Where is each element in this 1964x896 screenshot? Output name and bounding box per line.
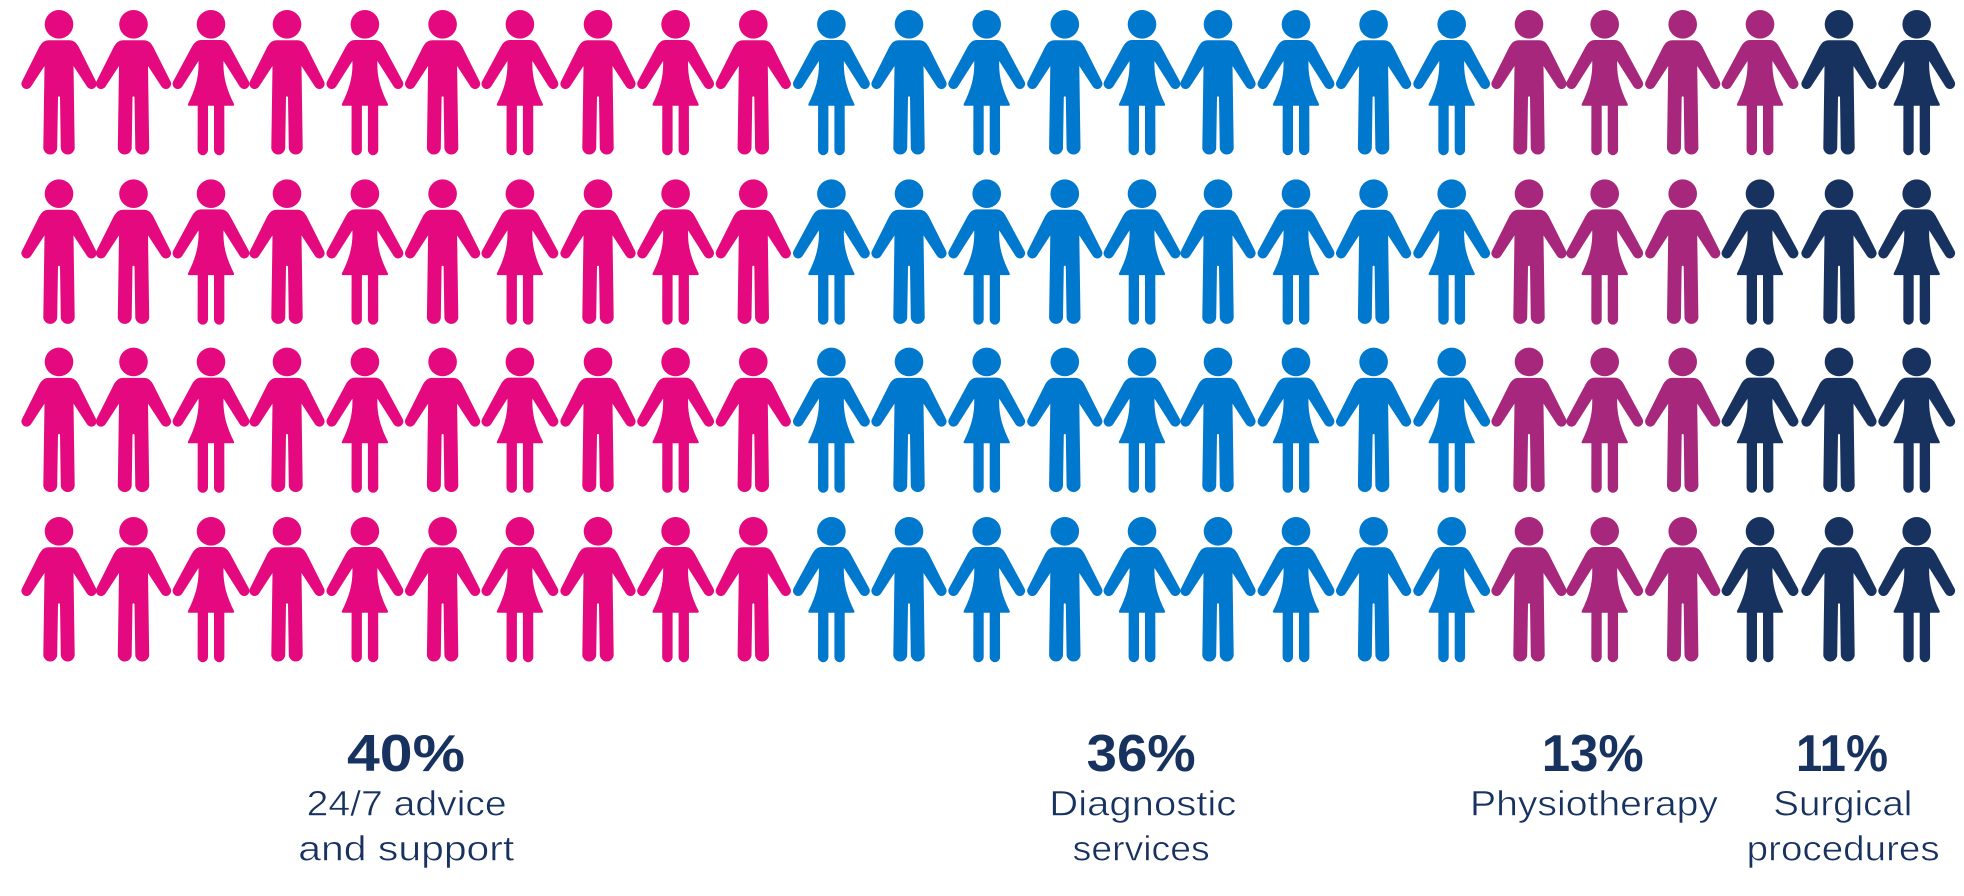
row 1 pink figures: 24/7 advice and support [21,10,791,155]
label: 11% surgical procedures: 11% [1796,725,1888,783]
pictogram row 1 [21,10,1955,155]
row 1 purple figures: physiotherapy [1491,10,1798,155]
row 4 blue figures [793,517,1490,662]
label: 36% diagnostic services: 36% [1087,725,1196,783]
label: 40% 24/7 advice and support: and support [298,830,515,869]
label: 40% 24/7 advice and support: 24/7 advice [307,785,507,824]
row 4 purple figures [1491,517,1720,662]
row 4 pink figures [21,517,791,662]
row 2 blue figures [793,179,1490,325]
row 3 pink figures [21,348,791,493]
pictogram row 3 [21,348,1955,493]
label: 11% surgical procedures [1747,725,1940,869]
row 4 navy figures [1722,517,1955,662]
label: 11% surgical procedures: Surgical [1773,785,1912,824]
label: 40% 24/7 advice and support [298,725,515,869]
label: 13% physiotherapy [1470,725,1719,824]
pictogram row 2 [21,179,1955,325]
pictogram row 4 [21,517,1955,662]
label: 11% surgical procedures: procedures [1747,830,1940,869]
row 1 navy figures: surgical procedures [1801,10,1955,155]
label: 13% physiotherapy: Physiotherapy [1470,785,1719,824]
label: 36% diagnostic services [1049,725,1236,869]
row 2 purple figures [1491,179,1720,325]
row 1 blue figures: diagnostic services [793,10,1490,155]
row 2 pink figures [21,179,791,325]
row 3 blue figures [793,348,1490,493]
row 3 navy figures [1722,348,1955,493]
label: 36% diagnostic services: services [1073,830,1210,869]
row 2 navy figures [1722,179,1955,325]
label: 36% diagnostic services: Diagnostic [1049,785,1236,824]
label: 40% 24/7 advice and support: 40% [347,725,465,783]
label: 13% physiotherapy: 13% [1542,725,1644,783]
row 3 purple figures [1491,348,1720,493]
